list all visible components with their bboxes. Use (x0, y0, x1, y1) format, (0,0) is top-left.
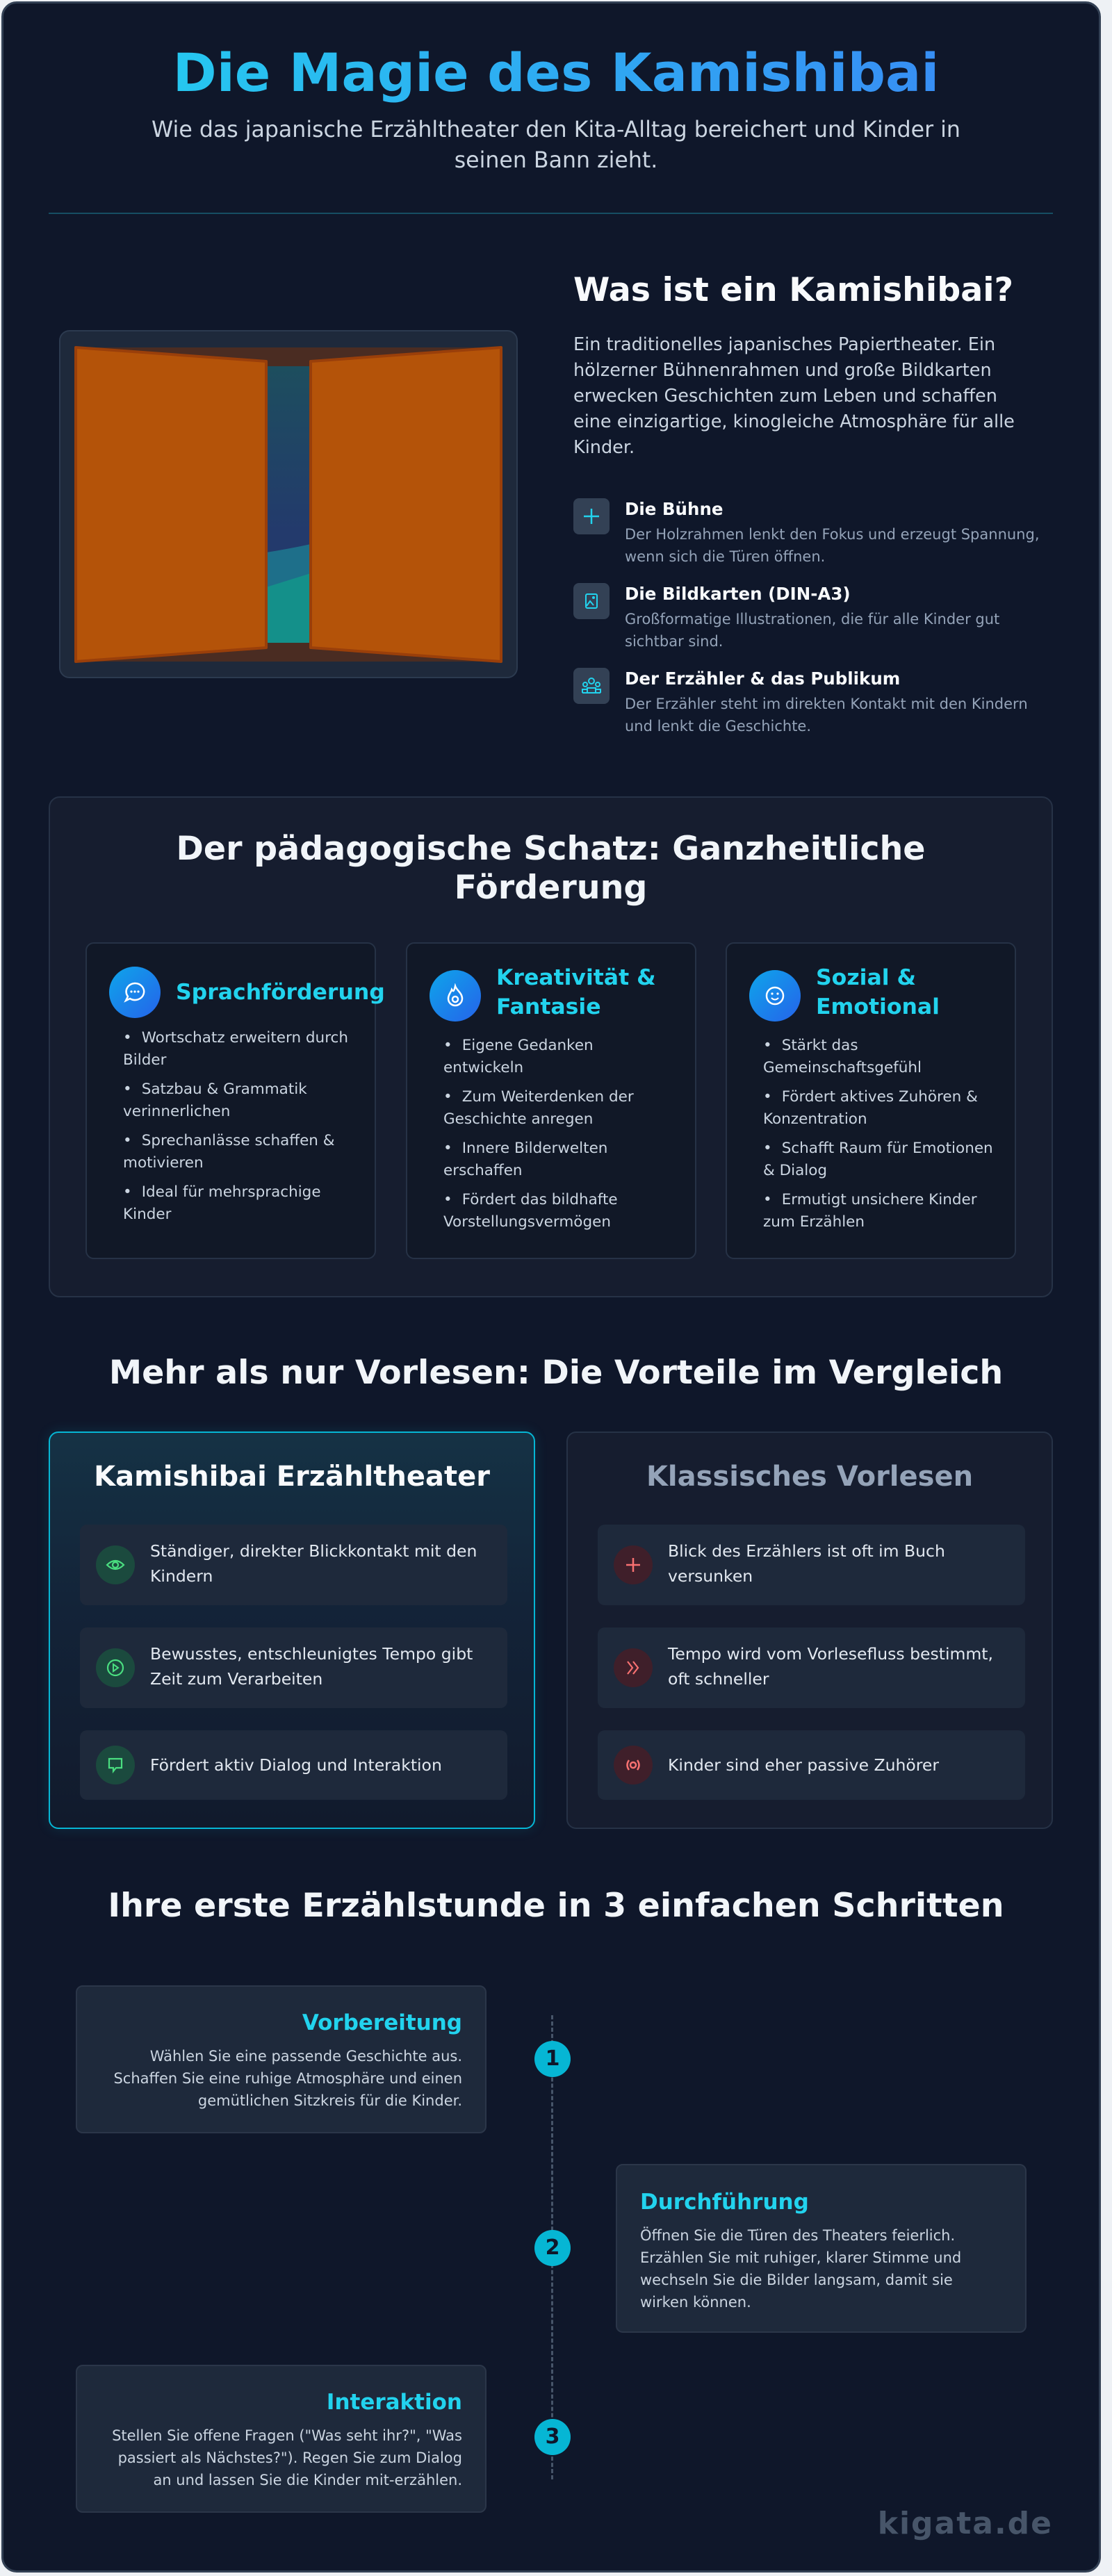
feature: Bildkarten: Großformatige Illustrationen, die für alle Kinder gut sichtbar sind. (625, 611, 999, 650)
card: Kreativität: Eigene Gedanken entwickeln (443, 1037, 594, 1076)
card: Sprachförderung: Wortschatz erweitern durch Bilder (123, 1029, 348, 1069)
card: Sprachförderung: Sprachförderung (176, 980, 385, 1005)
heading: Förderung (455, 869, 647, 907)
timeline line (551, 2015, 553, 2479)
item: Blickkontakt: Ständiger, direkter Blickkontakt mit den Kindern (150, 1541, 477, 1586)
card: Sprachförderung (85, 942, 376, 1259)
icon: speech bubble (109, 967, 161, 1018)
item: Dialog (80, 1730, 507, 1800)
marker 3: 3 (546, 2425, 559, 2449)
feature: Erzähler (573, 668, 1028, 735)
card: Sozial & Emotional: Sozial & (816, 965, 916, 990)
panel: Klassisches Vorlesen: Klassisches Vorlesen (646, 1461, 973, 1493)
step 2: Durchführung: Durchführung (640, 2190, 809, 2215)
feature: Erzähler: Der Erzähler & das Publikum (625, 668, 900, 689)
card: Sprachförderung: Ideal für mehrsprachige Kinder (123, 1183, 321, 1223)
panel: pädagogischer Schatz (49, 796, 1053, 1297)
item: Tempo (80, 1627, 507, 1708)
heading: Vergleich: Mehr als nur Vorlesen: Die Vorteile im Vergleich (109, 1354, 1003, 1392)
icon: plus (573, 498, 610, 534)
feature: Erzähler: Der Erzähler steht im direkten Kontakt mit den Kindern und lenkt die Geschichte. (625, 696, 1028, 735)
marker 1: 1 (546, 2046, 559, 2071)
item: Tempo schneller (598, 1627, 1025, 1708)
panel: Kamishibai Erzähltheater: Kamishibai Erzähltheater (94, 1461, 490, 1493)
panel: Klassisches Vorlesen (566, 1431, 1053, 1829)
footer brand: kigata.de (878, 2506, 1053, 2541)
feature: Die Bühne: Der Holzrahmen lenkt den Fokus und erzeugt Spannung, wenn sich die Türen öffnen. (625, 526, 1040, 565)
card: Sozial & Emotional: Fördert aktives Zuhören & Konzentration (763, 1088, 978, 1128)
illustration: kamishibai theater (59, 330, 518, 678)
title: Die Magie des Kamishibai (173, 42, 939, 104)
subtitle: Wie das japanische Erzähltheater den Kita-Alltag bereichert und Kinder in seinen Bann zieht. (152, 117, 960, 173)
heading: 3 Schritte: Ihre erste Erzählstunde in 3 einfachen Schritten (108, 1887, 1004, 1925)
card: Sozial & Emotional (726, 942, 1016, 1259)
marker 1 (534, 2041, 571, 2077)
icon: people (573, 668, 610, 704)
marker 2 (534, 2230, 571, 2266)
card: Sozial & Emotional: Emotional (816, 994, 940, 1019)
step 3: Interaktion: Stellen Sie offene Fragen ("Was seht ihr?", "Was passiert als Nächstes?"). Regen Sie zum Dialog an und lassen Sie die Kinder mit-erzählen. (112, 2427, 462, 2488)
card: Kreativität: Zum Weiterdenken der Geschichte anregen (443, 1088, 634, 1128)
item: Blick im Buch (598, 1525, 1025, 1605)
feature: Die Bühne (573, 498, 1040, 565)
card: Kreativität: Kreativität & (496, 965, 656, 990)
step 2: Durchführung (616, 2164, 1027, 2333)
marker 2: 2 (546, 2235, 559, 2260)
card: Sprachförderung: Satzbau & Grammatik verinnerlichen (123, 1081, 307, 1120)
card: Sprachförderung: Sprechanlässe schaffen & motivieren (123, 1132, 335, 1172)
item: Blickkontakt (80, 1525, 507, 1605)
step 1: Vorbereitung (76, 1985, 486, 2133)
heading: Was ist ein Kamishibai: Was ist ein Kamishibai? (573, 271, 1013, 309)
item: Tempo schneller: Tempo wird vom Vorlesefluss bestimmt, oft schneller (668, 1644, 993, 1689)
item: passive Zuhörer (598, 1730, 1025, 1800)
marker 3 (534, 2419, 571, 2455)
intro paragraph: Ein traditionelles japanisches Papiertheater. Ein hölzerner Bühnenrahmen und große Bildkarten erwecken Geschichten zum Leben und schaffen eine einzigartige, kinogleiche Atmosphäre für alle Kinder. (573, 334, 1015, 458)
left door (76, 347, 266, 662)
card: Kreativität (406, 942, 696, 1259)
heading (176, 830, 926, 907)
card: Kreativität: Innere Bilderwelten erschaffen (443, 1140, 607, 1179)
panel: Kamishibai Erzähltheater (49, 1431, 535, 1829)
card: Sozial & Emotional: Stärkt das Gemeinschaftsgefühl (763, 1037, 922, 1076)
item: passive Zuhörer: Kinder sind eher passive Zuhörer (668, 1755, 939, 1775)
card: Kreativität: Fördert das bildhafte Vorstellungsvermögen (443, 1191, 618, 1231)
step 3: Interaktion: Interaktion (327, 2390, 462, 2415)
item: Blick im Buch: Blick des Erzählers ist oft im Buch versunken (668, 1541, 945, 1586)
icon: flame (430, 970, 481, 1022)
feature: Bildkarten: Die Bildkarten (DIN-A3) (625, 584, 851, 604)
step 1: Vorbereitung: Wählen Sie eine passende Geschichte aus. Schaffen Sie eine ruhige Atmosphäre und einen gemütlichen Sitzkreis für die Kinder. (113, 2048, 462, 2109)
feature: Bildkarten (573, 583, 999, 650)
step 3: Interaktion (76, 2365, 486, 2513)
icon: smiley (749, 970, 801, 1022)
title (0, 38, 1112, 108)
step 2: Durchführung: Öffnen Sie die Türen des Theaters feierlich. Erzählen Sie mit ruhiger, klarer Stimme und wechseln Sie die Bilder langsam, damit sie wirken können. (640, 2227, 961, 2311)
card: Kreativität: Fantasie (496, 994, 601, 1019)
icon: image (573, 583, 610, 619)
feature: Die Bühne: Die Bühne (625, 499, 723, 519)
item: Dialog: Fördert aktiv Dialog und Interaktion (150, 1755, 442, 1775)
step 1: Vorbereitung: Vorbereitung (302, 2010, 462, 2035)
card: Sozial & Emotional: Schafft Raum für Emotionen & Dialog (763, 1140, 993, 1179)
item: Tempo: Bewusstes, entschleunigtes Tempo gibt Zeit zum Verarbeiten (150, 1644, 473, 1689)
card: Sozial & Emotional: Ermutigt unsichere Kinder zum Erzählen (763, 1191, 977, 1231)
heading: Der pädagogische Schatz: Ganzheitliche (176, 830, 926, 868)
right door (311, 347, 501, 662)
